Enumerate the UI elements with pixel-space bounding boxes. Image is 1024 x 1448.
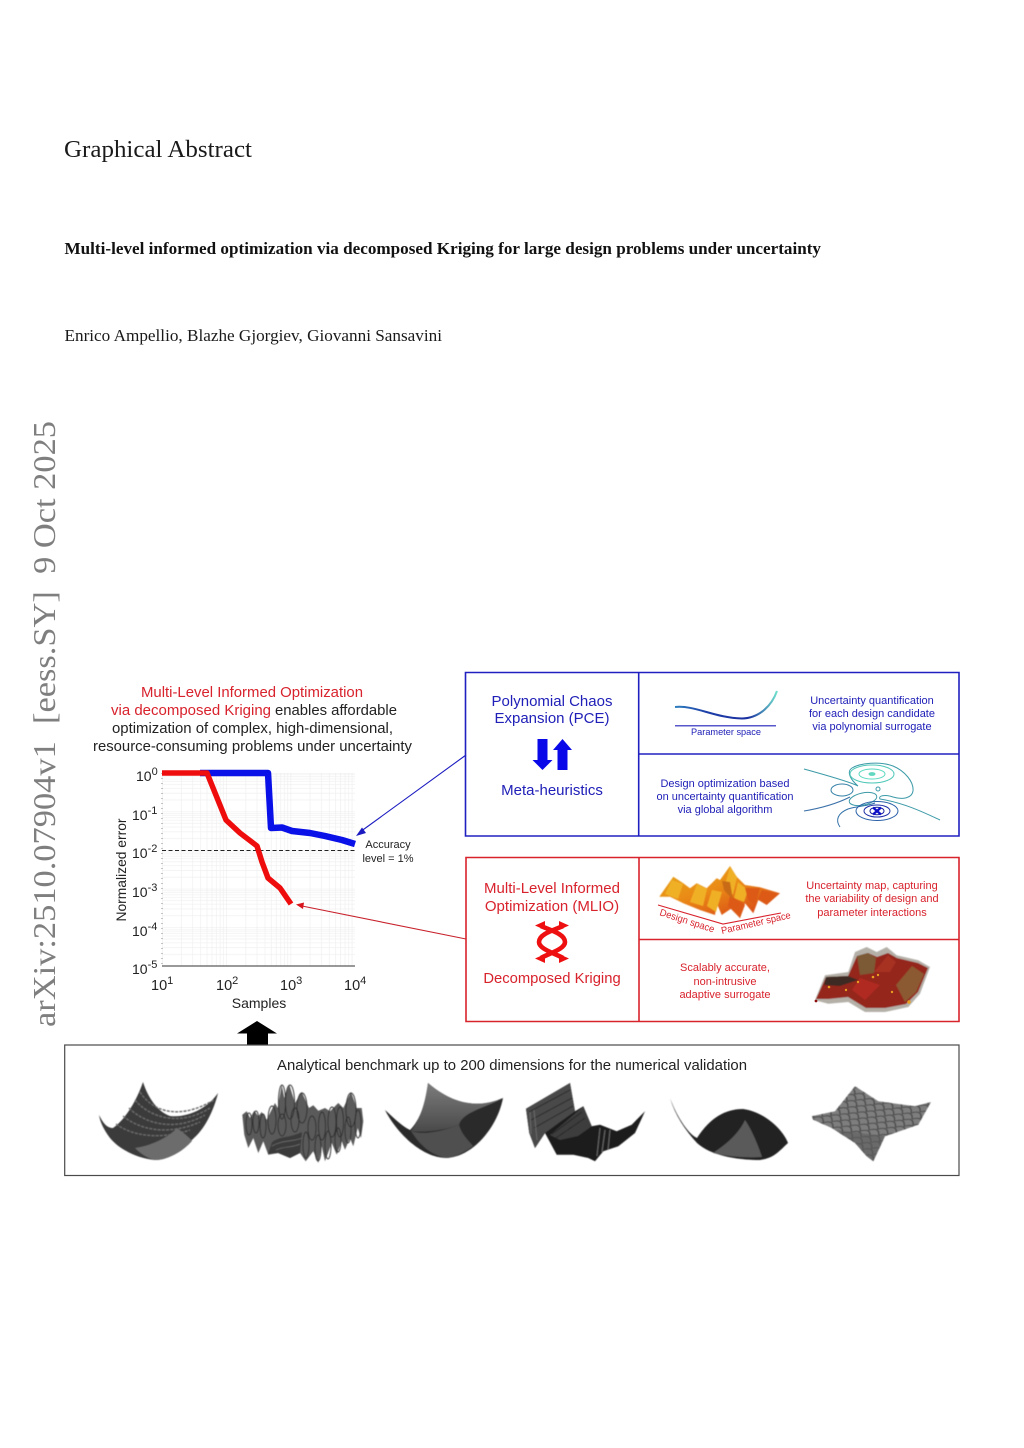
uncertainty map text: Uncertainty map, capturing — [806, 880, 938, 892]
PCE heading — [492, 693, 612, 727]
design optimization text: via global algorithm — [678, 804, 772, 816]
x axis tick labels: 10 — [344, 978, 360, 994]
surface 5: dark dome — [670, 1098, 788, 1160]
polynomial surrogate curve — [675, 691, 777, 737]
panel: PCE with meta-heuristics — [466, 672, 959, 836]
y axis title: Normalized error — [113, 818, 129, 922]
meta-heuristics label: Meta-heuristics — [501, 782, 603, 799]
paper title: Multi-level informed optimization via decomposed Kriging for large design problems under uncertainty — [64, 239, 821, 258]
x axis title: Samples — [232, 995, 286, 1011]
orange uncertainty map surface — [658, 866, 792, 937]
adaptive surrogate text — [679, 962, 771, 1001]
x axis tick labels: 2 — [232, 975, 238, 987]
panel: MLIO with decomposed Kriging — [466, 858, 959, 1022]
benchmark heading: Analytical benchmark up to 200 dimensions for the numerical validation — [277, 1058, 747, 1074]
MLIO heading: Optimization (MLIO) — [485, 898, 619, 915]
x axis tick labels: 10 — [151, 978, 167, 994]
surface 3: smooth bowl — [385, 1083, 503, 1158]
design optimization text — [657, 778, 793, 816]
uncertainty quantification text: for each design candidate — [809, 708, 935, 720]
y axis tick labels: -5 — [148, 959, 157, 971]
red adaptive surrogate surface — [815, 947, 930, 1012]
y axis tick labels: 10 — [132, 923, 148, 939]
MLIO heading: Multi-Level Informed — [484, 880, 620, 897]
summary statement — [93, 685, 413, 755]
x axis tick labels: 10 — [280, 978, 296, 994]
uncertainty quantification text: via polynomial surrogate — [812, 721, 932, 733]
convergence chart — [113, 766, 414, 1011]
authors: Enrico Ampellio, Blazhe Gjorgiev, Giovanni Sansavini — [64, 326, 442, 345]
uncertainty quantification text: Uncertainty quantification — [810, 695, 934, 707]
x axis tick labels: 4 — [360, 975, 366, 987]
summary statement: Multi-Level Informed Optimization — [141, 685, 363, 701]
orange uncertainty map surface: Design space — [658, 907, 716, 936]
uncertainty quantification text — [809, 695, 935, 733]
y axis tick labels: 0 — [152, 766, 158, 778]
surface 6: egg-crate funnel — [812, 1086, 931, 1161]
y axis tick labels: 10 — [132, 845, 148, 861]
accuracy label — [362, 839, 414, 865]
y axis tick labels: -2 — [148, 843, 157, 855]
y axis tick labels: -4 — [148, 921, 157, 933]
red MLIO convergence curve — [162, 773, 291, 904]
y axis tick labels: 10 — [132, 961, 148, 977]
x axis tick labels — [151, 975, 366, 994]
panel: analytical benchmark — [65, 1045, 959, 1176]
design optimization text: Design optimization based — [660, 778, 790, 790]
blue PCE convergence curve — [200, 773, 355, 844]
x axis tick labels: 10 — [216, 978, 232, 994]
summary statement: via decomposed Kriging — [111, 703, 271, 719]
y axis tick labels — [132, 766, 158, 977]
x axis tick labels: 1 — [167, 975, 173, 987]
MLIO heading — [484, 880, 620, 915]
y axis tick labels: -3 — [148, 882, 157, 894]
y axis tick labels: -1 — [148, 805, 157, 817]
orange uncertainty map surface: Parameter space — [720, 910, 792, 937]
design and parameter axes — [658, 905, 781, 924]
PCE heading: Polynomial Chaos — [492, 693, 612, 710]
accuracy label: Accuracy — [365, 839, 411, 851]
accuracy threshold line — [162, 850, 355, 852]
surface 4: curved valley — [526, 1083, 645, 1161]
y axis tick labels: 10 — [136, 768, 152, 784]
arrow: blue panel to blue curve — [356, 755, 466, 836]
uncertainty map text: the variability of design and — [805, 893, 939, 905]
y axis tick labels: 10 — [132, 807, 148, 823]
icon: intertwined arrows — [535, 921, 569, 963]
surface 1: rippled bowl — [99, 1082, 218, 1160]
summary statement: resource-consuming problems under uncertainty — [93, 739, 413, 755]
PCE heading: Expansion (PCE) — [494, 710, 610, 727]
x axis tick labels: 3 — [296, 975, 302, 987]
adaptive surrogate text: Scalably accurate, — [680, 962, 770, 974]
accuracy label: level = 1% — [362, 853, 414, 865]
uncertainty map text: parameter interactions — [817, 907, 927, 919]
heading: Graphical Abstract: Graphical Abstract — [64, 136, 252, 163]
icon: up and down arrows — [532, 739, 572, 770]
y axis tick labels: 10 — [132, 884, 148, 900]
arXiv stamp: arXiv:2510.07904v1 [eess.SY] 9 Oct 2025 — [26, 421, 62, 1027]
adaptive surrogate text: adaptive surrogate — [679, 989, 771, 1001]
design optimization text: on uncertainty quantification — [657, 791, 793, 803]
surface 2: multimodal spikes — [242, 1085, 363, 1163]
uncertainty map text — [805, 880, 939, 919]
arrow: red panel to red curve — [296, 902, 466, 939]
adaptive surrogate text: non-intrusive — [694, 976, 756, 988]
polynomial surrogate curve: Parameter space — [691, 727, 761, 737]
arrow: benchmark to chart — [237, 1021, 277, 1045]
decomposed Kriging label: Decomposed Kriging — [483, 971, 621, 987]
contour plot — [804, 763, 940, 827]
summary statement: enables affordable — [275, 703, 397, 719]
summary statement: optimization of complex, high-dimensional, — [112, 721, 393, 737]
